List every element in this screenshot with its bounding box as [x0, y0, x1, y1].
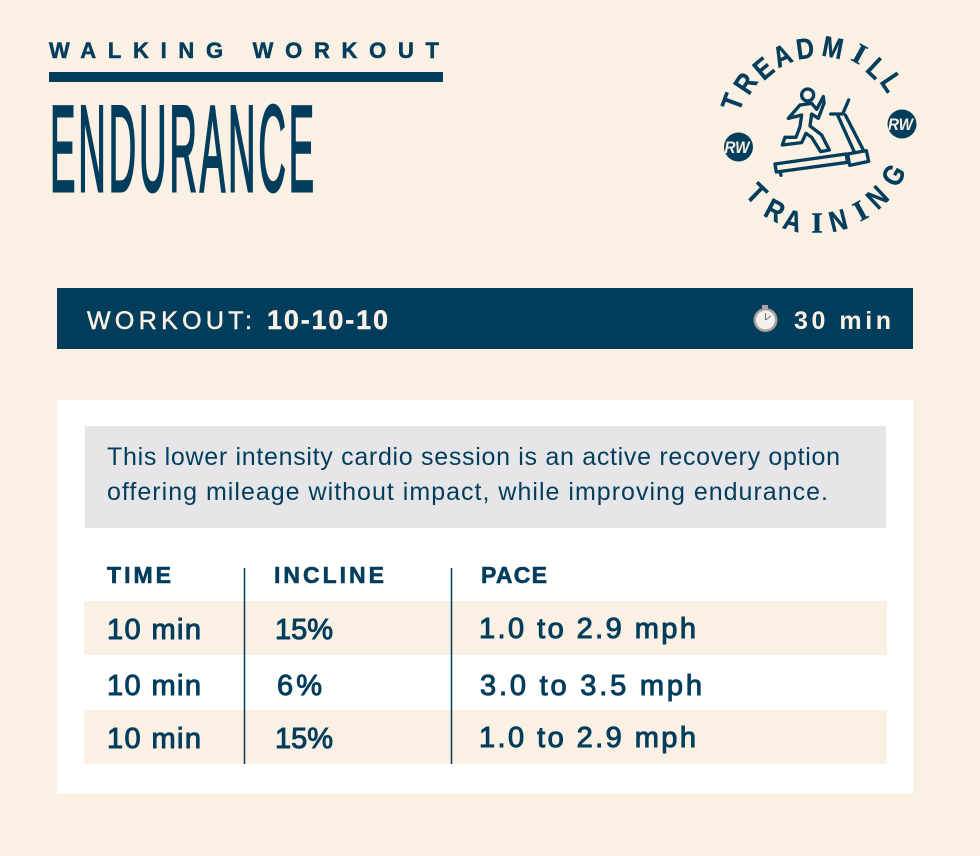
- logo ring text: TRAINING: N: [826, 203, 851, 239]
- table row 1: 10 min: [107, 614, 201, 646]
- logo ring text: TREADMILL: L: [860, 52, 893, 86]
- table row 3: 1.0 to 2.9 mph: [479, 722, 696, 754]
- icon: stopwatch: [754, 305, 778, 332]
- logo badge: left RW: RW: [724, 138, 751, 157]
- icon: runner on treadmill: [775, 89, 869, 175]
- panel: workout details: [57, 400, 913, 794]
- header kicker: WALKING WORKOUT: [49, 38, 440, 63]
- logo: treadmill training badge: [715, 30, 916, 240]
- description box: [85, 426, 886, 528]
- table row backgrounds: [84, 601, 887, 764]
- table header: PACE: [481, 562, 547, 588]
- logo ring text: TRAINING: R: [759, 192, 790, 229]
- logo ring text: TREADMILL: I: [847, 38, 872, 71]
- table header: [107, 562, 547, 588]
- table column dividers: [244, 568, 452, 764]
- title: ENDURANCE: [50, 82, 314, 218]
- table row 2: 6%: [277, 670, 322, 702]
- banner duration: 30 min: [794, 307, 891, 335]
- logo ring text: TREADMILL: T: [715, 89, 751, 115]
- table row 3: [107, 722, 696, 755]
- table row 1: 15%: [275, 614, 333, 646]
- description box: This lower intensity cardio session is an active recovery option: [107, 443, 840, 471]
- banner label: WORKOUT:: [87, 307, 252, 335]
- table row 2: [107, 670, 702, 702]
- logo ring text: TREADMILL: R: [727, 67, 764, 100]
- logo ring text: TREADMILL: M: [820, 30, 846, 66]
- logo ring text: TRAINING: N: [860, 180, 895, 215]
- logo ring text: TRAINING: G: [875, 159, 912, 192]
- logo badge: left RW: [724, 132, 753, 162]
- table header: TIME: [107, 562, 171, 588]
- logo badge: right RW: [888, 110, 916, 138]
- table header: INCLINE: [274, 562, 384, 588]
- logo ring text: TREADMILL: L: [874, 67, 909, 98]
- logo badge: right RW: RW: [888, 115, 915, 134]
- description box: offering mileage without impact, while improving endurance.: [107, 478, 828, 506]
- logo ring text: TRAINING: [740, 159, 912, 240]
- table row 2: 10 min: [107, 670, 201, 702]
- logo ring text: TREADMILL: D: [794, 32, 816, 66]
- logo ring text: TRAINING: T: [740, 177, 773, 211]
- table row 2: 3.0 to 3.5 mph: [480, 670, 702, 702]
- table row 3: 10 min: [107, 723, 201, 755]
- logo ring text: TRAINING: I: [848, 195, 873, 228]
- logo ring text: TREADMILL: A: [768, 37, 797, 74]
- logo ring text: TREADMILL: [715, 30, 909, 115]
- header rule: [49, 72, 443, 82]
- table row 1: [107, 613, 696, 646]
- table row 3: 15%: [275, 723, 333, 755]
- workout banner: [57, 288, 913, 349]
- table row 1: 1.0 to 2.9 mph: [479, 613, 696, 645]
- logo ring text: TRAINING: I: [811, 208, 823, 240]
- banner workout name: 10-10-10: [267, 305, 388, 335]
- logo ring text: TREADMILL: E: [747, 51, 780, 86]
- logo ring text: TRAINING: A: [780, 203, 806, 239]
